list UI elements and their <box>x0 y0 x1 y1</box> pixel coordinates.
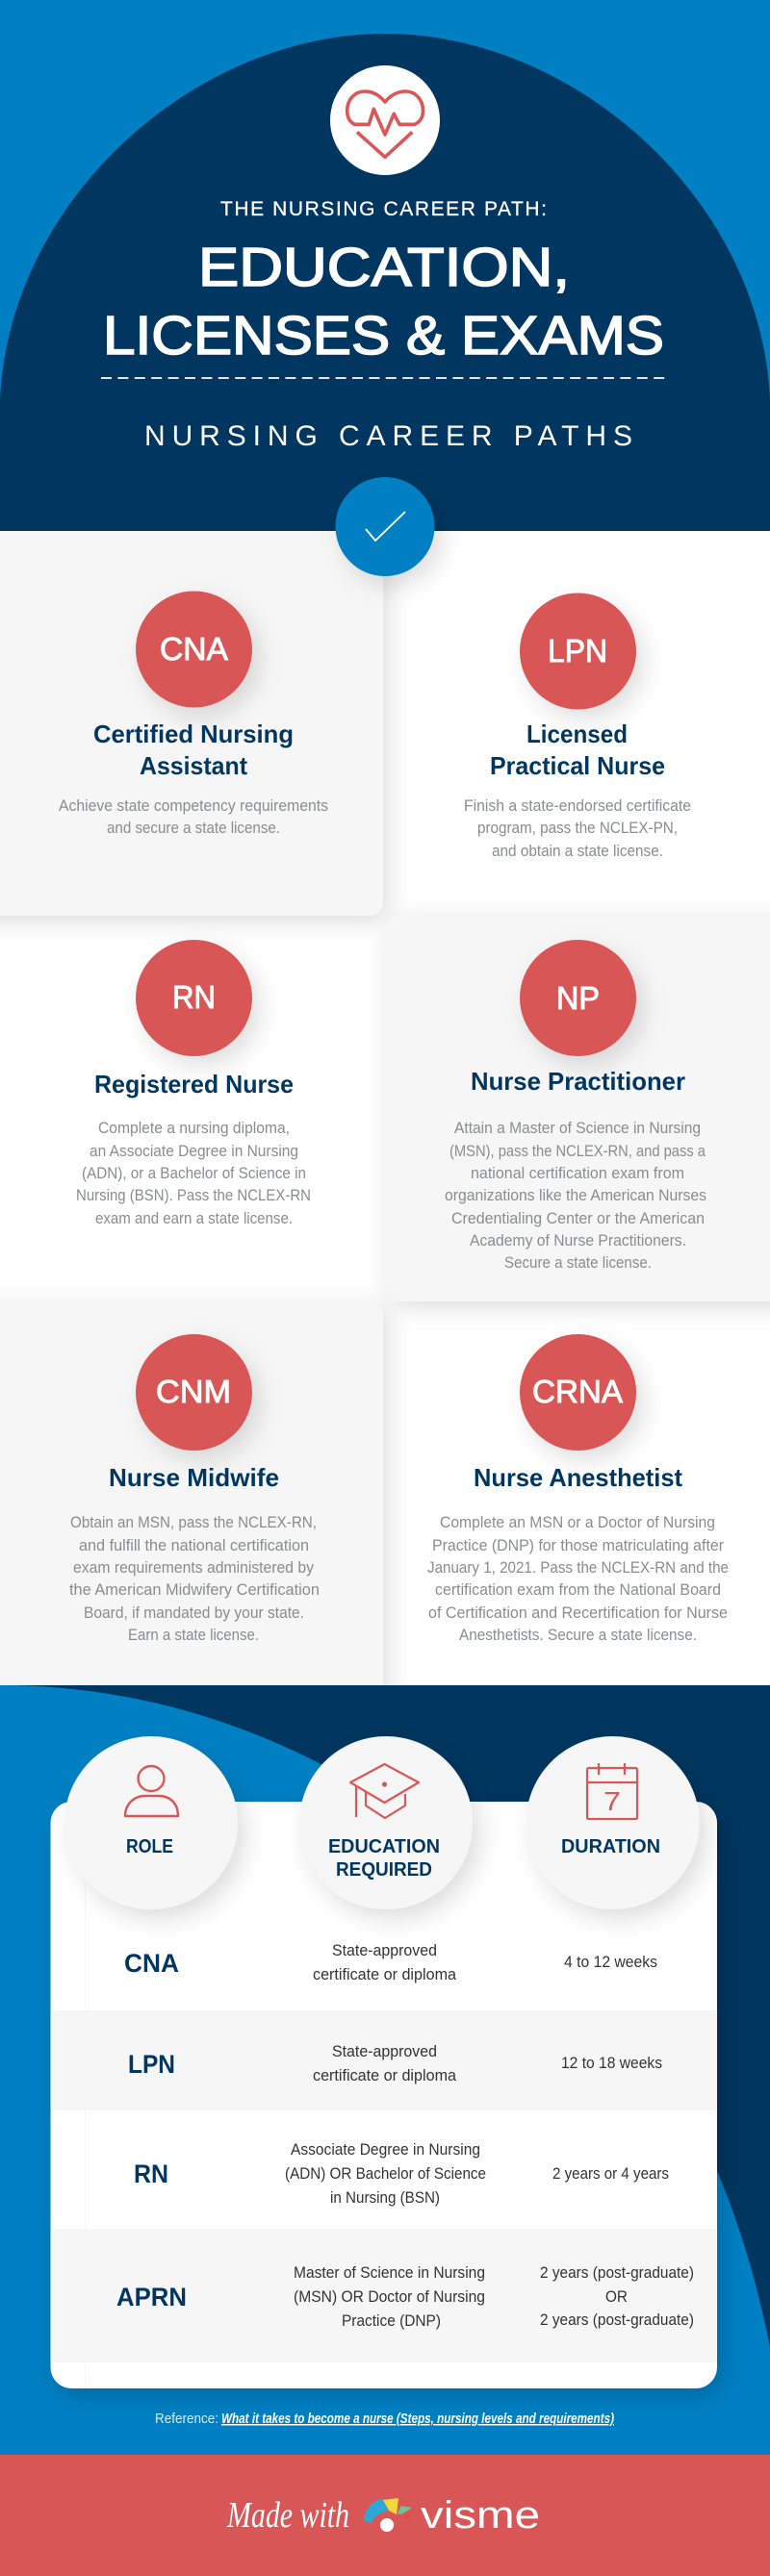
table row: CNA: 4 to 12 weeks <box>564 1953 657 1971</box>
title block: EDUCATION, <box>198 237 570 298</box>
LPN content <box>464 593 691 860</box>
panel: CNM card <box>0 1301 383 1715</box>
CNM content <box>69 1334 320 1644</box>
NP content: national certification exam from <box>471 1164 684 1182</box>
icon: heart with pulse <box>330 65 440 175</box>
NP content: Secure a state license. <box>504 1253 652 1272</box>
column header: education required <box>299 1736 473 1909</box>
table row: LPN: certificate or diploma <box>313 2066 457 2084</box>
RN content <box>76 940 311 1227</box>
RN content: RN <box>172 979 216 1015</box>
LPN content: and obtain a state license. <box>492 842 663 860</box>
table row: CNA: CNA <box>124 1949 179 1978</box>
CNM content: Nurse Midwife <box>109 1463 279 1492</box>
CRNA content <box>427 1334 729 1644</box>
CRNA content: of Certification and Recertification for Nurse <box>428 1604 728 1622</box>
RN content: Nursing (BSN). Pass the NCLEX-RN <box>76 1186 311 1204</box>
NP content: Nurse Practitioner <box>471 1067 685 1096</box>
panel: comparison table <box>50 1802 717 2388</box>
CRNA content: Practice (DNP) for those matriculating after <box>432 1536 724 1554</box>
table row: RN: (ADN) OR Bachelor of Science <box>285 2164 486 2183</box>
CRNA content: January 1, 2021. Pass the NCLEX-RN and the <box>427 1558 729 1577</box>
header background <box>0 0 770 531</box>
table row: RN: RN <box>134 2159 168 2188</box>
table row: APRN: Master of Science in Nursing <box>294 2263 485 2282</box>
table row: LPN: LPN <box>128 2050 175 2079</box>
table row: APRN <box>116 2263 694 2330</box>
table row: LPN: State-approved <box>332 2042 437 2060</box>
title block: LICENSES & EXAMS <box>103 305 664 366</box>
CNA content <box>59 591 328 837</box>
career cards background <box>0 531 770 1685</box>
CNM content: exam requirements administered by <box>73 1558 314 1577</box>
NP content: Credentialing Center or the American <box>451 1209 705 1227</box>
title block <box>101 198 670 452</box>
table row: APRN: Practice (DNP) <box>342 2311 441 2330</box>
reference line: What it takes to become a nurse (Steps, nursing levels and requirements) <box>221 2412 614 2427</box>
table row: APRN: (MSN) OR Doctor of Nursing <box>294 2287 485 2306</box>
CNM content: Earn a state license. <box>128 1626 259 1644</box>
RN content: (ADN), or a Bachelor of Science in <box>82 1164 306 1182</box>
LPN content: Finish a state-endorsed certificate <box>464 796 691 815</box>
RN content: an Associate Degree in Nursing <box>90 1142 298 1160</box>
panel: NP card <box>385 916 770 1301</box>
CNA content: CNA <box>160 631 228 667</box>
reference line: Reference: <box>155 2412 218 2427</box>
table section background <box>0 1685 770 2455</box>
column header: education required: EDUCATION <box>328 1836 440 1857</box>
LPN content: program, pass the NCLEX-PN, <box>477 819 678 837</box>
NP content: Attain a Master of Science in Nursing <box>454 1119 701 1137</box>
table row: RN <box>134 2140 669 2207</box>
NP content: (MSN), pass the NCLEX-RN, and pass a <box>449 1142 706 1160</box>
CNA content: Assistant <box>140 751 247 780</box>
column header: role: ROLE <box>126 1836 173 1857</box>
CNM content: and fulfill the national certification <box>79 1536 309 1554</box>
footer band <box>0 2455 770 2576</box>
table row: RN: in Nursing (BSN) <box>330 2188 440 2207</box>
CNM content: Board, if mandated by your state. <box>84 1604 304 1622</box>
LPN content: Practical Nurse <box>490 751 665 780</box>
column header: education required: REQUIRED <box>336 1859 432 1881</box>
CNA content: Achieve state competency requirements <box>59 796 328 815</box>
CRNA content: Complete an MSN or a Doctor of Nursing <box>440 1513 715 1531</box>
CNM content: Obtain an MSN, pass the NCLEX-RN, <box>70 1513 317 1531</box>
NP content <box>445 940 706 1272</box>
table row: RN: Associate Degree in Nursing <box>291 2140 480 2159</box>
RN content: Registered Nurse <box>94 1070 294 1099</box>
LPN content: LPN <box>548 633 607 669</box>
table row: RN: 2 years or 4 years <box>552 2164 669 2183</box>
NP content: Academy of Nurse Practitioners. <box>470 1231 686 1250</box>
table row: CNA: certificate or diploma <box>313 1965 457 1983</box>
table row: LPN: 12 to 18 weeks <box>561 2054 662 2072</box>
CRNA content: CRNA <box>532 1374 623 1409</box>
table row: CNA <box>124 1941 657 1983</box>
CNA content: Certified Nursing <box>93 720 294 748</box>
CRNA content: Anesthetists. Secure a state license. <box>459 1626 697 1644</box>
table row: APRN: 2 years (post-graduate) <box>540 2311 694 2329</box>
column header: duration: 7 <box>603 1786 621 1816</box>
table row: APRN: 2 years (post-graduate) <box>540 2263 694 2282</box>
table row: APRN: APRN <box>116 2283 187 2311</box>
LPN content: Licensed <box>526 720 628 748</box>
title block: NURSING CAREER PATHS <box>144 420 632 452</box>
table row: LPN <box>128 2042 662 2084</box>
table row: APRN: OR <box>605 2287 628 2306</box>
CNA content: and secure a state license. <box>107 819 280 837</box>
column header: role <box>64 1736 238 1909</box>
title block: THE NURSING CAREER PATH: <box>220 198 547 220</box>
footer band: visme <box>421 2494 540 2537</box>
CNM content: the American Midwifery Certification <box>69 1580 320 1599</box>
panel: CNA card <box>0 502 383 916</box>
CRNA content: Nurse Anesthetist <box>474 1463 682 1492</box>
column header: duration: DURATION <box>561 1836 660 1857</box>
table row: CNA: State-approved <box>332 1941 437 1959</box>
column header: duration <box>526 1736 699 1909</box>
CRNA content: certification exam from the National Board <box>435 1580 721 1599</box>
NP content: organizations like the American Nurses <box>445 1186 706 1204</box>
NP content: NP <box>556 980 600 1016</box>
CNM content: CNM <box>156 1374 231 1409</box>
RN content: exam and earn a state license. <box>95 1209 293 1227</box>
RN content: Complete a nursing diploma, <box>98 1119 290 1137</box>
check badge <box>335 477 435 576</box>
footer band: Made with <box>226 2495 349 2536</box>
